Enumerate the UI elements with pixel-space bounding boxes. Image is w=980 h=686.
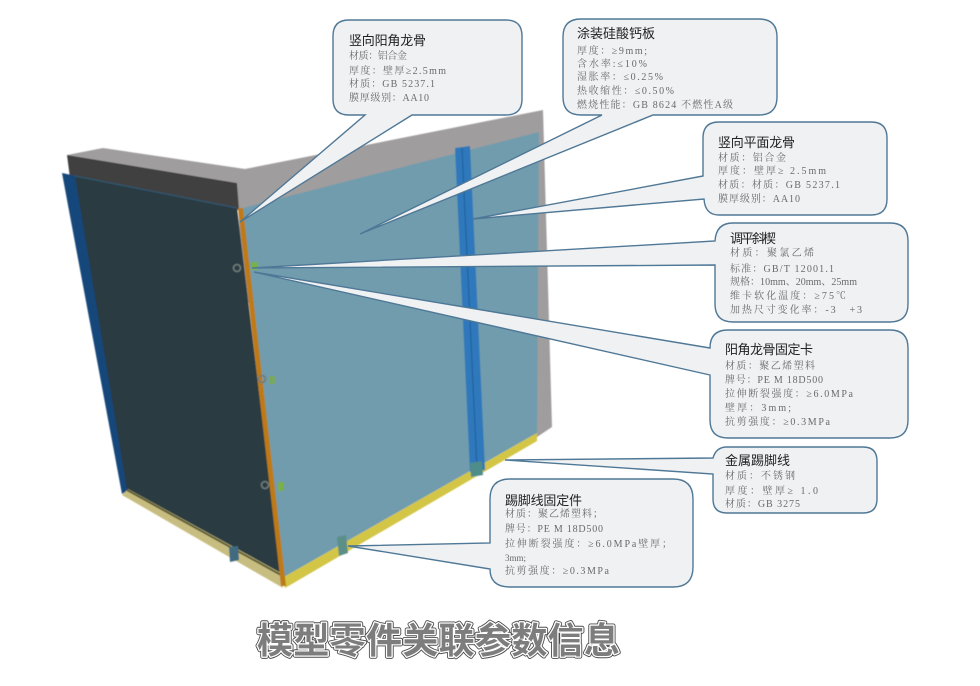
callout: 调平斜楔: 调平斜楔 — [730, 231, 776, 246]
dark left panel — [75, 176, 281, 575]
callout: 调平斜楔: 材质：聚氯乙烯 — [730, 246, 814, 259]
callout: 金属踢脚线: 金属踢脚线 — [725, 453, 790, 468]
callout: 金属踢脚线: 材质：GB 3275 — [725, 497, 800, 510]
left baseboard — [122, 489, 283, 588]
callout: 涂装硅酸钙板 — [360, 19, 777, 234]
callout: 涂装硅酸钙板: 燃烧性能：GB 8624 不燃性A级 — [577, 98, 733, 111]
callout: 阳角龙骨固定卡: 牌号：PE M 18D500 — [725, 373, 823, 386]
callout: 竖向平面龙骨 — [473, 122, 887, 219]
blue stud strip on left panel — [62, 173, 129, 494]
callout: 竖向阳角龙骨: 竖向阳角龙骨 — [349, 33, 426, 48]
callout: 阳角龙骨固定卡: 阳角龙骨固定卡 — [725, 342, 813, 357]
corner clip set 1 — [234, 262, 258, 272]
callout: 竖向阳角龙骨: 材质：铝合金 — [349, 49, 407, 62]
title: 模型零件关联参数信息: 模型零件关联参数信息 — [257, 620, 620, 661]
callout: 涂装硅酸钙板: 厚度：≥9mm; — [577, 44, 647, 57]
callout: 涂装硅酸钙板: 含水率:≤10% — [577, 57, 647, 70]
callout: 涂装硅酸钙板: 涂装硅酸钙板 — [577, 26, 655, 41]
vertical flat stud — [455, 146, 485, 472]
panel top edge line — [75, 176, 237, 208]
callout: 踢脚线固定件: 3mm; — [505, 553, 526, 563]
baseboard clip right — [470, 461, 483, 477]
callout: 涂装硅酸钙板: 湿胀率：≤0.25% — [577, 70, 663, 83]
callout: 调平斜楔: 加热尺寸变化率：-3 +3 — [730, 303, 862, 316]
callout: 阳角龙骨固定卡 — [254, 272, 908, 438]
callout: 阳角龙骨固定卡: 拉伸断裂强度：≥6.0MPa — [725, 387, 854, 400]
dark coping band — [67, 155, 239, 210]
callout: 竖向平面龙骨: 膜厚级别：AA10 — [718, 192, 800, 205]
callout: 金属踢脚线 — [505, 447, 877, 513]
callout: 阳角龙骨固定卡: 材质：聚乙烯塑料 — [725, 359, 815, 372]
callout: 竖向平面龙骨: 材质：材质：GB 5237.1 — [718, 178, 840, 191]
callout: 金属踢脚线: 厚度：壁厚≥ 1.0 — [725, 484, 818, 497]
callout: 金属踢脚线: 材质：不锈钢 — [725, 469, 795, 482]
left baseboard shadow edge — [127, 490, 281, 575]
callout: 竖向平面龙骨: 竖向平面龙骨 — [718, 135, 795, 150]
corner clip set 3 — [262, 482, 284, 491]
callout: 踢脚线固定件: 牌号：PE M 18D500 — [505, 522, 603, 535]
callout: 涂装硅酸钙板: 热收缩性：≤0.50% — [577, 84, 674, 97]
stud centre line — [462, 148, 477, 470]
corner clip set 2 — [258, 376, 275, 384]
callout: 阳角龙骨固定卡: 抗剪强度：≥0.3MPa — [725, 415, 831, 428]
callout: 竖向阳角龙骨: 厚度：壁厚≥2.5mm — [349, 64, 446, 77]
baseboard clip middle — [337, 535, 348, 556]
callout: 竖向平面龙骨: 材质：铝合金 — [718, 151, 786, 164]
grey wall top and back wall — [67, 110, 552, 437]
callout: 调平斜楔: 标准：GB/T 12001.1 — [730, 262, 834, 275]
orange corner stud — [238, 208, 286, 586]
callout: 阳角龙骨固定卡: 壁厚：3mm; — [725, 401, 791, 414]
callout: 竖向平面龙骨: 厚度：壁厚≥ 2.5mm — [718, 164, 826, 177]
callout: 调平斜楔 — [252, 223, 908, 322]
title: 模型零件关联参数信息: 模型零件关联参数信息 — [257, 620, 620, 661]
callout: 竖向阳角龙骨 — [240, 20, 522, 222]
callout: 踢脚线固定件 — [348, 479, 693, 587]
baseboard clip left — [229, 546, 239, 562]
callout: 调平斜楔: 规格：10mm、20mm、25mm — [730, 275, 857, 288]
callout: 竖向阳角龙骨: 膜厚级别：AA10 — [349, 91, 429, 104]
callout: 踢脚线固定件: 抗剪强度：≥0.3MPa — [505, 564, 610, 577]
callout: 踢脚线固定件: 材质：聚乙烯塑料； — [505, 507, 603, 520]
right baseboard — [284, 433, 537, 588]
callout: 调平斜楔: 维卡软化温度：≥75℃ — [730, 289, 846, 302]
callout: 踢脚线固定件: 踢脚线固定件 — [505, 493, 582, 508]
callout: 竖向阳角龙骨: 材质：GB 5237.1 — [349, 77, 435, 90]
teal right panel — [243, 132, 539, 577]
callout: 踢脚线固定件: 拉伸断裂强度：≥6.0MPa壁厚； — [505, 537, 672, 550]
3D wall corner model — [62, 110, 552, 588]
